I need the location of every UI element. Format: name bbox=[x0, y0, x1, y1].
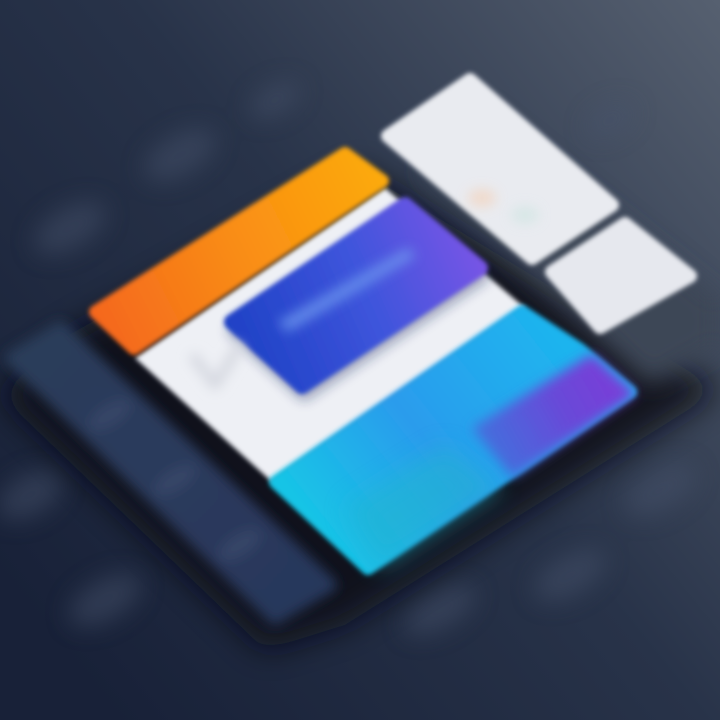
teal lower chip bbox=[345, 445, 502, 568]
blurred card marks bbox=[468, 189, 496, 207]
panel: navy side panel bbox=[12, 328, 330, 618]
panel: blue feature card bbox=[232, 205, 482, 394]
panel: dark grey tray behind right cards bbox=[420, 110, 720, 385]
panel: upper right white card bbox=[388, 80, 612, 258]
side panel rows bbox=[84, 393, 266, 567]
background: faint blurred tiles bbox=[0, 74, 705, 646]
panel: white base of main card bbox=[135, 188, 525, 482]
blurred label on blue card bbox=[278, 248, 416, 332]
panel: orange header band bbox=[96, 154, 382, 348]
card drop shadow bbox=[0, 170, 720, 650]
purple chip bbox=[472, 354, 636, 478]
panel: lower right white card bbox=[552, 224, 690, 327]
panel: cyan lower band bbox=[276, 312, 636, 568]
check mark on white base bbox=[192, 345, 240, 385]
